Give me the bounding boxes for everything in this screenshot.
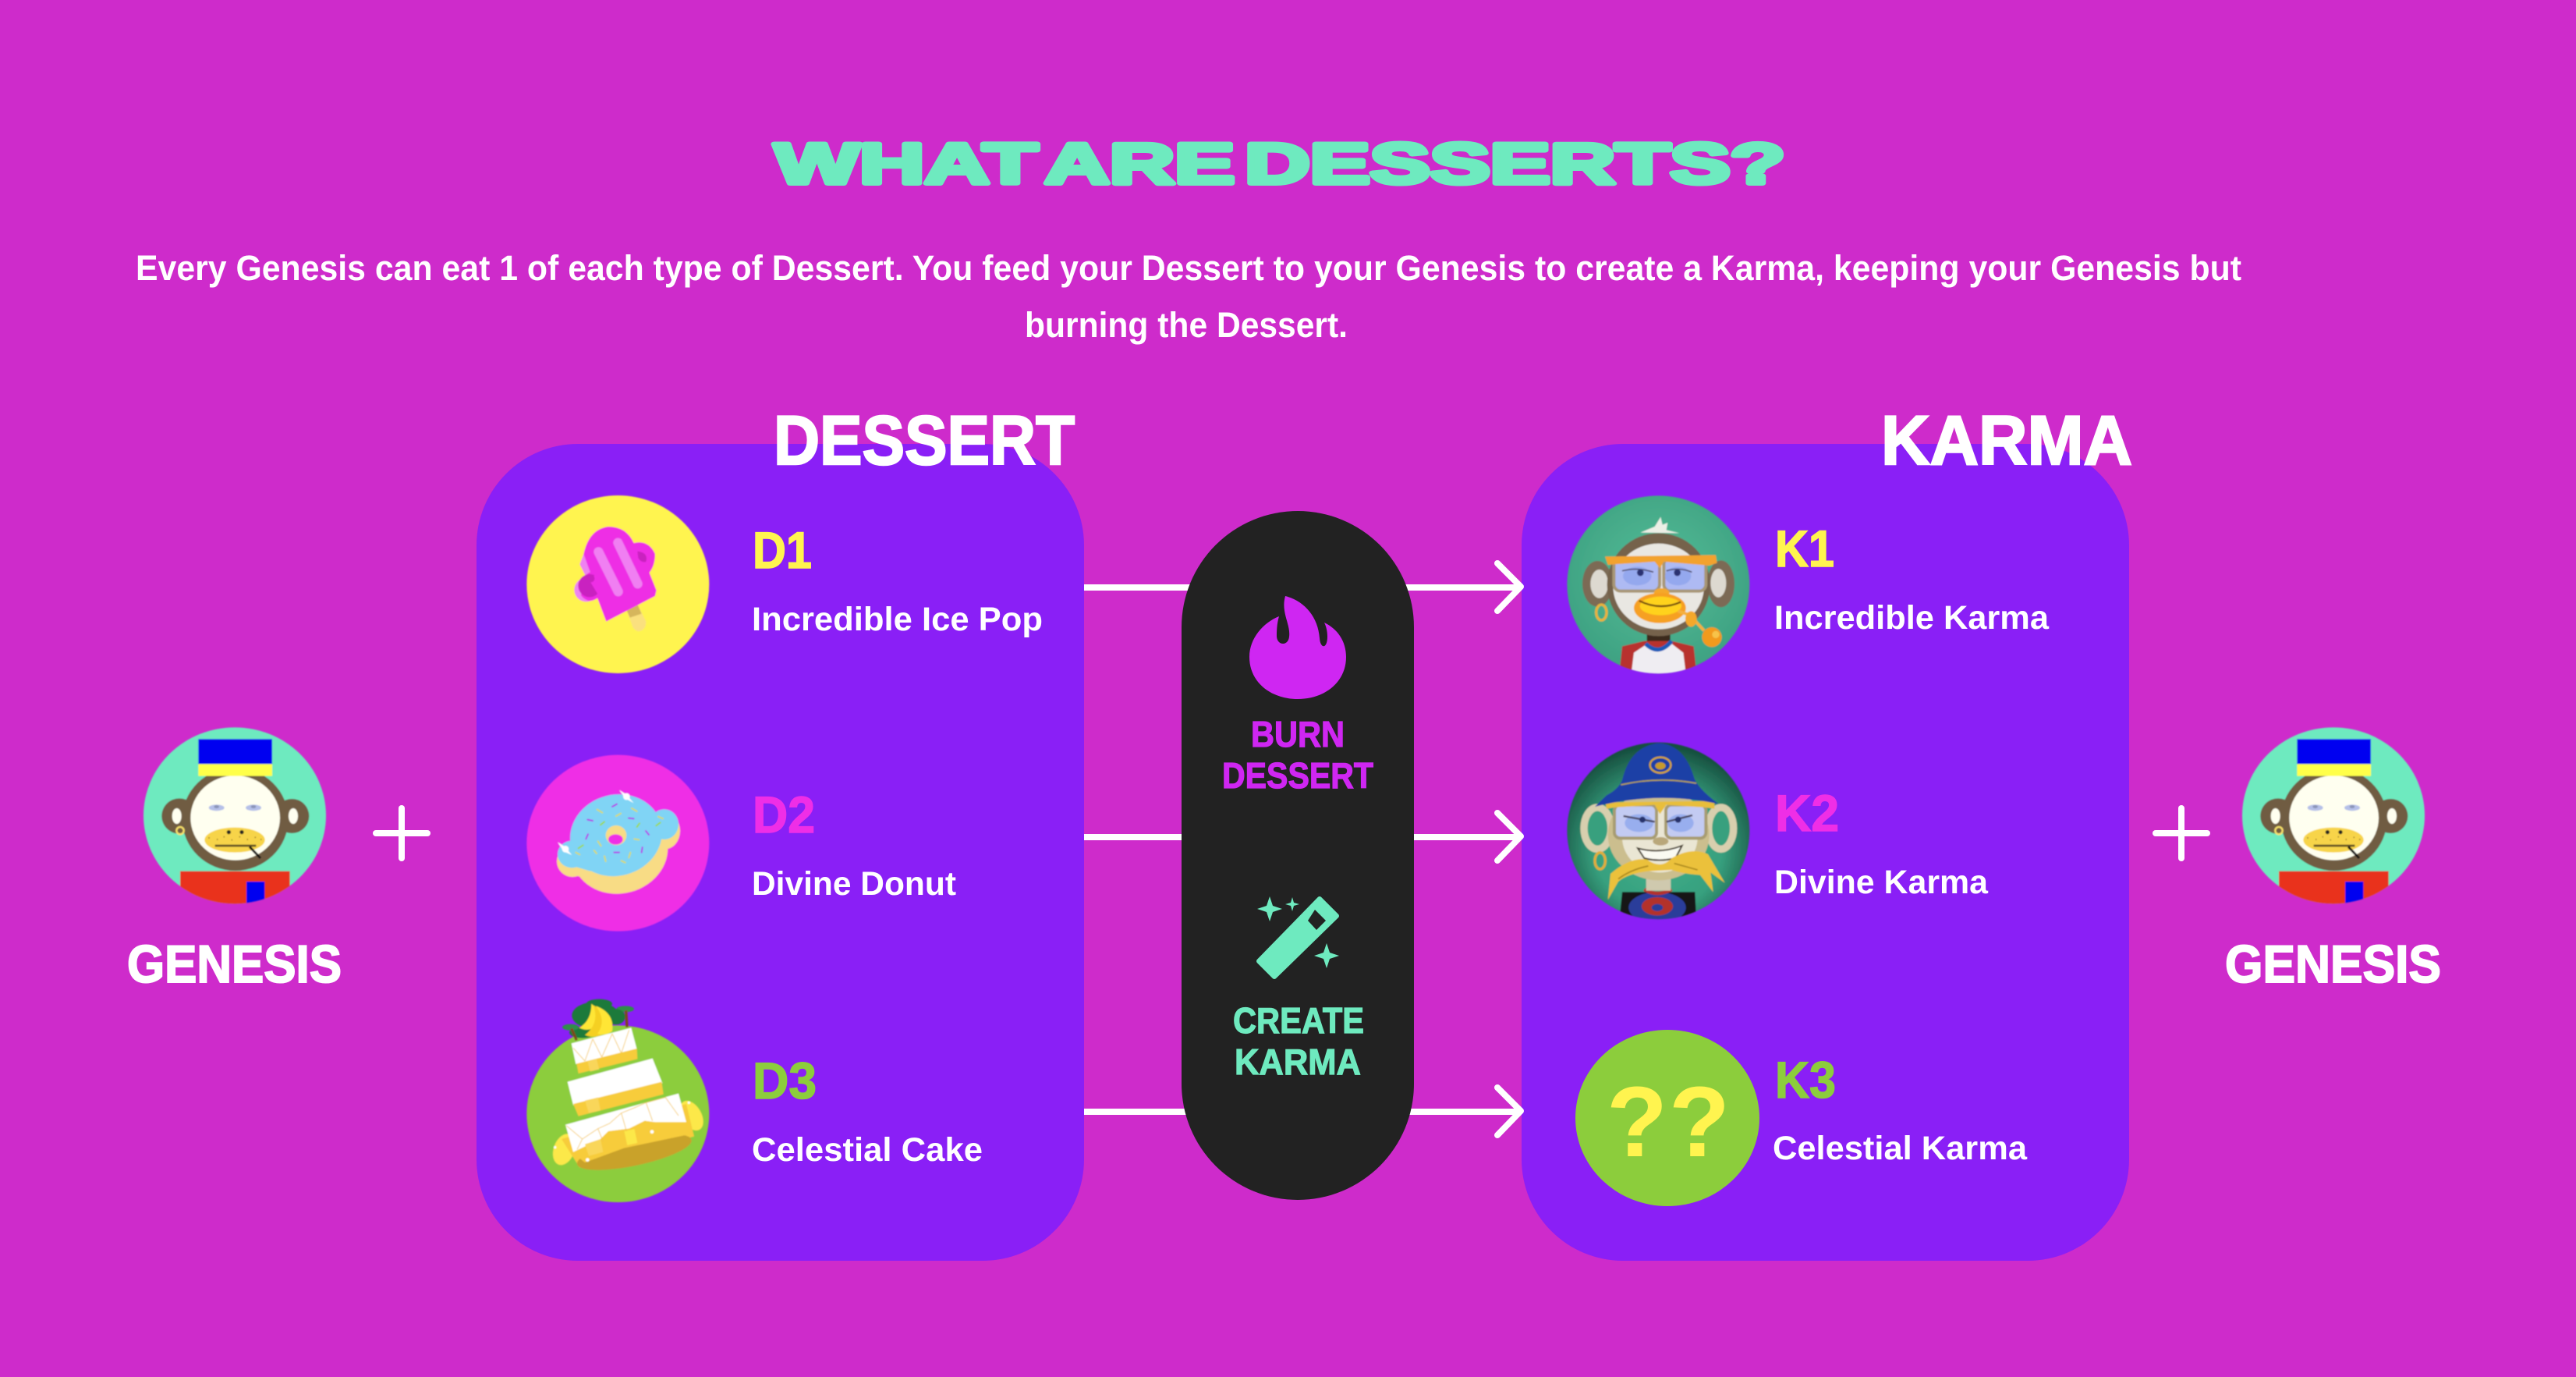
label: create karma: CREATE bbox=[1233, 1000, 1364, 1041]
label: Incredible Karma: Incredible Karma bbox=[1774, 599, 2050, 637]
intro text: Every Genesis can eat 1 of each type of Dessert. You feed your Dessert to your Genesis to create a Karma, keeping your Genesis but bbox=[136, 248, 2241, 288]
label: Divine Karma: Divine Karma bbox=[1774, 864, 1989, 901]
plus right bbox=[2156, 808, 2207, 858]
panel: karma bbox=[1522, 401, 2132, 1261]
label: Incredible Ice Pop: Incredible Ice Pop bbox=[752, 601, 1043, 638]
label: Celestial Cake: Celestial Cake bbox=[752, 1131, 983, 1169]
label: burn dessert bbox=[1222, 714, 1373, 796]
icon: donut bbox=[526, 755, 709, 932]
icon: K2 monkey bbox=[1567, 743, 1749, 923]
label: D1: D1 bbox=[753, 521, 812, 579]
icon: K3 mystery: ? bbox=[1669, 1066, 1730, 1178]
icon: cake bbox=[526, 999, 709, 1202]
icon: magic wand bbox=[1257, 896, 1339, 977]
intro text: burning the Dessert. bbox=[1025, 305, 1348, 345]
icon: K1 monkey bbox=[1567, 495, 1749, 673]
label: burn dessert: BURN bbox=[1251, 714, 1345, 754]
label: Divine Donut: Divine Donut bbox=[752, 865, 956, 903]
label: K1: K1 bbox=[1775, 520, 1834, 577]
arrow: bottom bbox=[1084, 1088, 1521, 1135]
decoration: palms and bananas bbox=[562, 999, 634, 1040]
icon: ice pop bbox=[526, 495, 709, 673]
icon: genesis monkey left bbox=[144, 727, 326, 907]
icon: K3 mystery bbox=[1575, 1030, 1759, 1206]
label: Celestial Karma: Celestial Karma bbox=[1773, 1130, 2028, 1167]
label: K3: K3 bbox=[1775, 1051, 1836, 1109]
title: WHAT ARE DESSERTS? bbox=[774, 133, 1785, 196]
label: genesis left: GENESIS bbox=[127, 935, 342, 994]
heading: karma: KARMA bbox=[1881, 401, 2132, 479]
panel: dessert bbox=[477, 401, 1084, 1261]
icon: flame bbox=[1249, 596, 1346, 699]
panel: burn and create pill bbox=[1182, 511, 1414, 1200]
arrow: top bbox=[1084, 563, 1521, 611]
icon: K3 mystery: ? bbox=[1607, 1066, 1667, 1178]
heading: dessert: DESSERT bbox=[774, 401, 1075, 479]
label: D2: D2 bbox=[753, 786, 815, 843]
arrow: middle bbox=[1084, 813, 1521, 861]
label: create karma bbox=[1233, 1000, 1364, 1082]
label: K2: K2 bbox=[1775, 784, 1839, 842]
plus left bbox=[376, 808, 427, 858]
label: burn dessert: DESSERT bbox=[1222, 755, 1373, 796]
label: genesis right: GENESIS bbox=[2225, 935, 2441, 994]
icon: genesis monkey right bbox=[2242, 727, 2425, 907]
intro text bbox=[136, 248, 2241, 345]
label: create karma: KARMA bbox=[1235, 1042, 1361, 1082]
label: D3: D3 bbox=[753, 1052, 817, 1109]
